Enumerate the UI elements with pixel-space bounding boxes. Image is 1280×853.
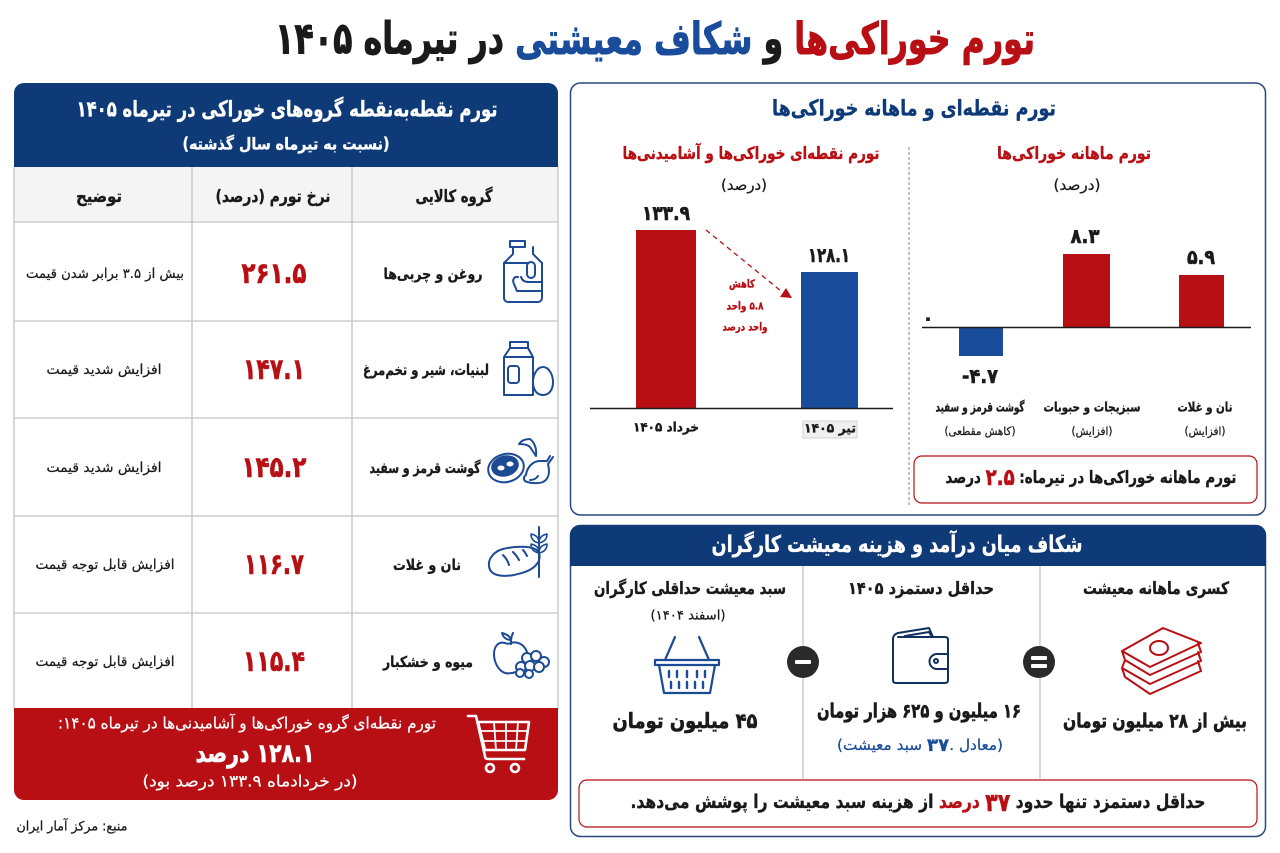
panel: point-to-point and monthly food inflation <box>570 83 1266 515</box>
row: oils and fats <box>26 241 542 302</box>
bar chart: monthly inflation: (درصد) <box>1054 176 1100 194</box>
icon: steak and chicken <box>485 439 553 486</box>
column: monthly living deficit: کسری ماهانه معیشت <box>1083 579 1229 599</box>
row: fruit and nuts: ۱۱۵.۴ <box>243 644 305 678</box>
column: monthly living deficit <box>1063 579 1247 732</box>
callout: overall food inflation: تورم نقطه‌ای گروه خوراکی‌ها و آشامیدنی‌ها در تیرماه ۱۴۰۵: <box>58 714 436 734</box>
column: minimum wage: حداقل دستمزد ۱۴۰۵ <box>848 579 994 599</box>
title: تورم خوراکی‌ها و شکاف معیشتی در تیرماه ۱۴۰۵ <box>275 14 1035 64</box>
bar chart: monthly inflation: ۵.۹ <box>1187 245 1215 269</box>
bar chart: point inflation: تورم نقطه‌ای خوراکی‌ها و آشامیدنی‌ها <box>622 142 880 164</box>
row: dairy and eggs: لبنیات، شیر و تخم‌مرغ <box>363 361 489 379</box>
bar chart: point inflation: ۱۳۳.۹ <box>642 201 690 225</box>
row: dairy and eggs: افزایش شدید قیمت <box>46 362 162 378</box>
callout: monthly food inflation <box>914 456 1257 503</box>
bar chart: monthly inflation: (کاهش مقطعی) <box>944 424 1016 439</box>
row: red and white meat <box>46 439 553 486</box>
bar chart: point inflation: تیر ۱۴۰۵ <box>804 422 856 436</box>
icon: minus sign <box>787 646 819 678</box>
arrow: decline <box>706 230 792 298</box>
bar chart: monthly inflation: گوشت قرمز و سفید <box>936 400 1025 416</box>
icon: milk carton and egg <box>504 342 553 395</box>
panel header: شکاف میان درآمد و هزینه معیشت کارگران <box>712 529 1082 558</box>
row: oils and fats: روغن و چربی‌ها <box>384 265 482 284</box>
column: minimum living basket: سبد معیشت حداقلی کارگران <box>594 578 786 599</box>
callout: overall food inflation: (در خردادماه ۱۳۳.۹ درصد بود) <box>143 772 358 792</box>
panel: income and cost of living gap <box>570 525 1266 836</box>
callout: overall food inflation <box>14 708 558 800</box>
bar chart: monthly inflation: تورم ماهانه خوراکی‌ها <box>997 144 1151 164</box>
column headings <box>14 167 558 222</box>
row: fruit and nuts <box>36 633 549 678</box>
column: minimum wage: (معادل .۳۷ سبد معیشت) <box>837 734 1003 756</box>
panel: food group inflation table <box>14 83 558 800</box>
row: red and white meat: افزایش شدید قیمت <box>46 460 162 476</box>
column: minimum living basket: (اسفند ۱۴۰۴) <box>650 608 726 624</box>
bar chart: monthly inflation: ۰ <box>923 308 933 328</box>
column headings: نرخ تورم (درصد) <box>216 187 330 207</box>
column headings: توضیح <box>76 187 122 207</box>
decline label: ۵.۸ واحد <box>726 300 764 312</box>
icon: stack of banknotes <box>1122 628 1201 694</box>
bar chart: point inflation <box>590 142 893 438</box>
column headings: گروه کالایی <box>416 186 493 207</box>
row: dairy and eggs <box>46 342 553 395</box>
row: bread and grains: نان و غلات <box>393 556 461 574</box>
source note: منبع: مرکز آمار ایران <box>16 818 128 834</box>
row: oils and fats: ۲۶۱.۵ <box>242 256 306 290</box>
icon: wallet <box>893 628 948 683</box>
table header band <box>14 83 558 167</box>
table header band: تورم نقطه‌به‌نقطه گروه‌های خوراکی در تیرماه ۱۴۰۵ <box>77 96 498 122</box>
column: minimum living basket <box>594 578 786 733</box>
column: minimum living basket: ۴۵ میلیون تومان <box>612 709 758 733</box>
bar chart: monthly inflation: سبزیجات و حبوبات <box>1044 400 1140 416</box>
bar chart: point inflation: (درصد) <box>721 176 767 194</box>
column: minimum wage: ۱۶ میلیون و ۶۲۵ هزار تومان <box>817 700 1021 722</box>
icon: oil bottle <box>504 241 542 302</box>
panel header <box>570 525 1266 566</box>
bar chart: monthly inflation: (افزایش) <box>1072 424 1112 439</box>
icon: apple and grapes <box>494 633 549 678</box>
bar chart: monthly inflation: نان و غلات <box>1178 400 1232 416</box>
icon: bread and wheat <box>489 527 547 577</box>
row: dairy and eggs: ۱۴۷.۱ <box>243 352 305 386</box>
icon: shopping cart <box>468 716 529 772</box>
table header band: (نسبت به تیرماه سال گذشته) <box>182 134 390 154</box>
column: minimum wage <box>817 579 1021 756</box>
bar chart: monthly inflation: ۸.۳ <box>1070 224 1100 248</box>
callout: overall food inflation: ۱۲۸.۱ درصد <box>196 739 314 769</box>
column: monthly living deficit: بیش از ۲۸ میلیون تومان <box>1063 710 1247 732</box>
decline label: کاهش <box>729 278 755 290</box>
bar chart: monthly inflation: (افزایش) <box>1184 424 1226 439</box>
row: bread and grains <box>36 527 547 581</box>
row: red and white meat: گوشت قرمز و سفید <box>370 459 481 477</box>
row: oils and fats: بیش از ۳.۵ برابر شدن قیمت <box>26 266 184 282</box>
decline label: واحد درصد <box>722 320 768 334</box>
panel heading: تورم نقطه‌ای و ماهانه خوراکی‌ها <box>772 96 1056 122</box>
decline label <box>722 278 768 334</box>
row: fruit and nuts: افزایش قابل توجه قیمت <box>36 654 174 670</box>
bar chart: monthly inflation <box>922 144 1251 439</box>
bar chart: point inflation: ۱۲۸.۱ <box>808 243 850 267</box>
row: bread and grains: ۱۱۶.۷ <box>244 547 304 581</box>
row: bread and grains: افزایش قابل توجه قیمت <box>36 557 174 573</box>
bar chart: monthly inflation: -۴.۷ <box>962 364 998 388</box>
bar chart: point inflation: خرداد ۱۴۰۵ <box>633 420 699 436</box>
row: red and white meat: ۱۴۵.۲ <box>242 450 307 484</box>
callout: wage coverage: حداقل دستمزد تنها حدود ۳۷ درصد از هزینه سبد معیشت را پوشش می‌دهد. <box>631 788 1206 816</box>
row: fruit and nuts: میوه و خشکبار <box>382 653 473 671</box>
callout: wage coverage <box>579 780 1257 827</box>
icon: basket <box>655 637 719 693</box>
icon: equals sign <box>1023 646 1055 678</box>
